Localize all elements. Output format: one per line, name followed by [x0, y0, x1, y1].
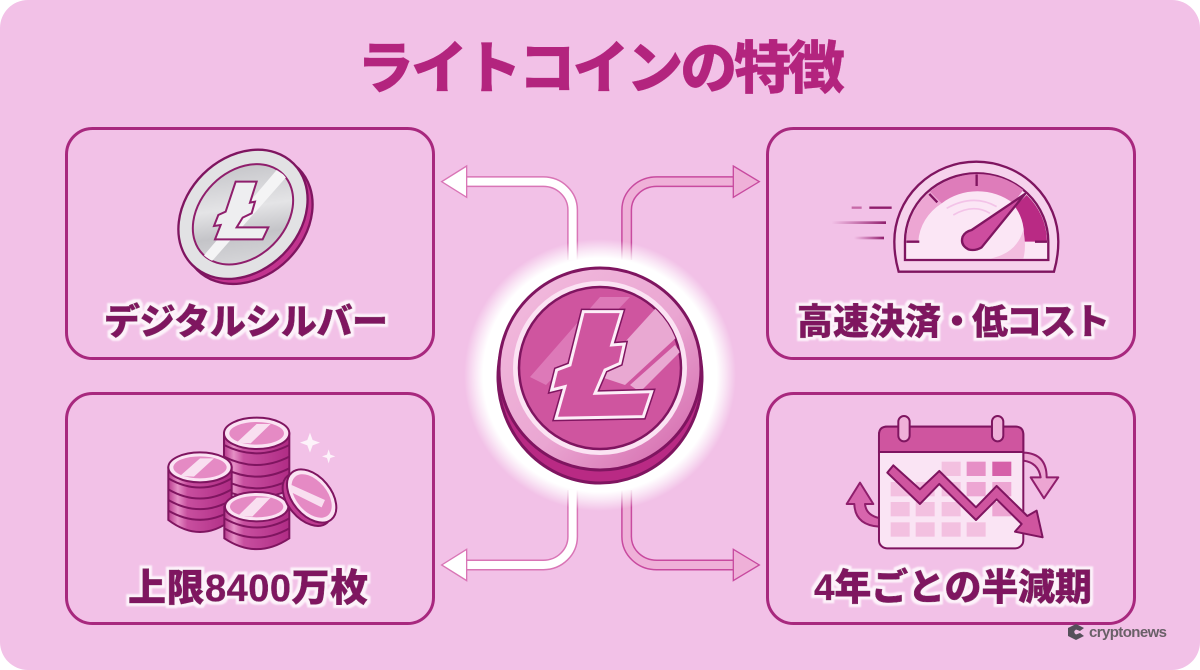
- icon: cycle arrow right: [1023, 453, 1058, 498]
- chart arrow: falling zigzag: [887, 465, 1043, 537]
- panel: halving: [768, 394, 1134, 624]
- label: fast low cost: 高速決済・低コスト: [797, 301, 1108, 342]
- panel: fast low cost: [768, 128, 1134, 358]
- arrow: bottom left: [442, 490, 573, 581]
- logo: cryptonews: cryptonews: [1089, 624, 1167, 641]
- panel: supply cap: [66, 394, 434, 624]
- icon: cryptonews mark: [1068, 624, 1084, 640]
- icon: calendar: [847, 416, 1058, 548]
- arrow: bottom right: [627, 490, 759, 581]
- icon: sparkles: [300, 433, 335, 463]
- title: ライトコインの特徴: [357, 37, 845, 101]
- icon: central litecoin: [464, 239, 736, 511]
- label: halving: 4年ごとの半減期: [814, 566, 1092, 608]
- label: supply cap: 上限8400万枚: [128, 568, 368, 610]
- icon: speedometer: [832, 162, 1058, 272]
- arrow: top left: [442, 166, 573, 260]
- panel: digital silver: [66, 124, 434, 358]
- icon: cycle arrow left: [847, 483, 879, 527]
- label: digital silver: デジタルシルバー: [104, 301, 388, 342]
- arrow: top right: [627, 166, 759, 260]
- arrows: [442, 166, 759, 581]
- icon: coin stacks: [168, 418, 346, 549]
- litecoin symbol: [552, 312, 652, 418]
- icon: silver coin: [177, 148, 314, 286]
